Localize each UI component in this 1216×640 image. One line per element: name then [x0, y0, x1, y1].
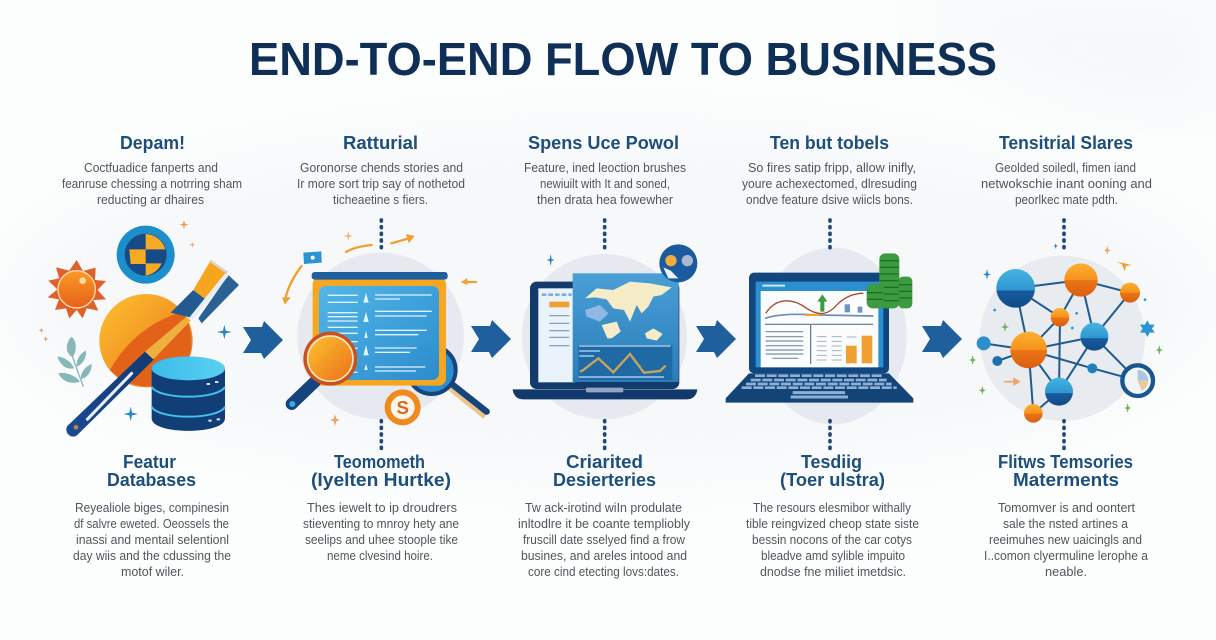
step 3 bottom description: inltodlre it be coante templiobly [518, 517, 691, 531]
step 2 description: ticheaetine s fiers. [333, 193, 428, 207]
arrow: step 2 to 3 [471, 320, 511, 358]
step 3 bottom description [518, 501, 691, 579]
step 2 bottom heading: (Iyelten Hurtke) [311, 470, 451, 490]
icon: sun [48, 260, 106, 318]
step 5 description [981, 161, 1152, 207]
step 3 bottom description: core cind etecting lovs:dates. [528, 565, 679, 579]
icon: laptop with world map [513, 220, 697, 448]
network nodes [977, 263, 1153, 423]
step 5 bottom heading: Materments [1013, 470, 1119, 490]
step 4 bottom heading [780, 452, 885, 490]
step 4 heading: Ten but tobels [770, 133, 889, 153]
step 5 description: Geolded soiledl, fimen iand [995, 161, 1136, 175]
step 5 bottom heading [998, 452, 1133, 490]
step 1 bottom description: Reyealiole biges, compinesin [75, 501, 229, 515]
step 1 heading: Depam! [120, 133, 185, 153]
step 4 description: youre achexectomed, dlresuding [742, 177, 917, 191]
step 3 description: newiuilt with It and soned, [540, 177, 670, 191]
step 1 description: Coctfuadice fanperts and [84, 161, 218, 175]
title: END-TO-END FLOW TO BUSINESS [249, 33, 997, 85]
step 3 bottom description: busines, and areles intood and [521, 549, 687, 563]
step 1 bottom description [73, 501, 231, 579]
keyboard [726, 373, 913, 403]
arrow: step 4 to 5 [922, 320, 962, 358]
step 2 bottom description: stieventing to mnroy hety ane [303, 517, 459, 531]
step 3 heading: Spens Uce Powol [528, 133, 679, 153]
step 1 description: reducting ar dhaires [97, 193, 204, 207]
step 5 bottom description: reeimuhes new uaicingls and [989, 533, 1142, 547]
step 2 description [297, 161, 465, 207]
step 5 bottom description: neable. [1045, 565, 1087, 579]
step 4 bottom description: tible reingvized cheop state siste [746, 517, 919, 531]
panel: step 3 [513, 133, 697, 579]
sparkle [547, 254, 555, 266]
step 4 bottom heading: Tesdiig [801, 452, 862, 472]
step 1 description [62, 161, 242, 207]
coin: S [396, 397, 409, 418]
step 3 description: then drata hea fowewher [537, 193, 673, 207]
step 4 bottom description: dnodse fne miliet imetdsic. [760, 565, 906, 579]
map panel [573, 273, 679, 382]
step 5 description: peorlkec mate pdth. [1015, 193, 1118, 207]
board [312, 272, 448, 386]
sparkles and small marks [969, 243, 1163, 413]
icon: sun, badge, brush and database [38, 220, 239, 437]
network edges [984, 280, 1138, 413]
step 2 bottom description [303, 501, 459, 563]
step 4 bottom description: bessin nocons of the car cotys [752, 533, 912, 547]
globe badge [659, 244, 697, 282]
step 1 bottom description: day wiis and the cdussing the [73, 549, 231, 563]
step 1 description: feanruse chessing a notrring sham [62, 177, 242, 191]
step 4 description [742, 161, 917, 207]
step 2 description: Ir more sort trip say of nothetod [297, 177, 465, 191]
step 2 bottom description: neme clvesind hoire. [327, 549, 433, 563]
money stacks [867, 253, 912, 308]
step 3 bottom description: Tw ack-irotind wiIn produlate [525, 501, 682, 515]
step 2 heading: Ratturial [343, 133, 418, 153]
small orange arrows and tag [282, 231, 476, 426]
left magnifier [289, 332, 357, 407]
step 1 bottom heading [107, 452, 196, 490]
step 2 bottom heading: Teomometh [334, 452, 425, 472]
step 5 description: netwokschie inant ooning and [981, 177, 1152, 191]
laptop body [513, 282, 697, 399]
step 4 bottom heading: (Toer ulstra) [780, 470, 885, 490]
step 3 description [524, 161, 686, 207]
step 2 bottom description: seelips and uhee stoople tike [305, 533, 458, 547]
step 5 bottom description: I..comon clyermuline lerophe a [984, 549, 1148, 563]
panel: step 2 [282, 133, 487, 563]
icon: checker badge [117, 226, 175, 284]
step 1 bottom heading: Databases [107, 470, 196, 490]
step 3 bottom heading: Criarited [566, 452, 643, 472]
step 1 bottom description: df salvre eweted. Oeossels the [74, 517, 229, 531]
step 2 bottom description: Thes iewelt to ip droudrers [307, 501, 457, 515]
step 5 bottom description: sale the nsted artines a [1003, 517, 1128, 531]
icon: large sphere [99, 294, 193, 387]
icon: network graph [969, 220, 1163, 448]
panel: step 4 [726, 133, 919, 579]
step 1 bottom heading: Featur [123, 452, 176, 472]
laptop screen [749, 273, 889, 373]
coin [385, 389, 421, 425]
step 1 bottom description: inassi and mentail selentionl [76, 533, 229, 547]
icon: sparkles [38, 220, 232, 421]
step 5 bottom description: Tomomver is and oontert [998, 501, 1136, 515]
step 4 bottom description: The resours elesmibor withally [753, 501, 912, 515]
arrow: step 3 to 4 [696, 320, 736, 358]
step 3 description: Feature, ined leoction brushes [524, 161, 686, 175]
step 1 bottom description: motof wiler. [121, 565, 184, 579]
step 4 bottom description [746, 501, 919, 579]
icon: leaf [57, 337, 92, 387]
step 3 bottom description: fruscill date sselyed find a frow [523, 533, 686, 547]
step 2 description: Goronorse chends stories and [300, 161, 463, 175]
step 5 heading: Tensitrial Slares [999, 133, 1133, 153]
step 2 bottom heading [311, 452, 451, 490]
icon: laptop with charts and money [726, 220, 913, 448]
step 3 bottom heading: Desierteries [553, 470, 656, 490]
arrow: step 1 to 2 [243, 321, 283, 359]
icon: document board with magnifiers [282, 220, 487, 448]
step 4 description: So fires satip fripp, allow inifly, [748, 161, 916, 175]
step 3 bottom heading [553, 452, 656, 490]
panel: step 1 feature databases [38, 133, 242, 579]
panel: step 5 [969, 133, 1163, 579]
step 4 description: ondve feature dsive wiicls bons. [746, 193, 913, 207]
step 5 bottom heading: Flitws Temsories [998, 452, 1133, 472]
step 4 bottom description: bleadve amd sylible impuito [761, 549, 905, 563]
icon: brush [66, 261, 239, 437]
step 5 bottom description [984, 501, 1148, 579]
right magnifier [408, 346, 487, 416]
icon: database [152, 356, 225, 431]
